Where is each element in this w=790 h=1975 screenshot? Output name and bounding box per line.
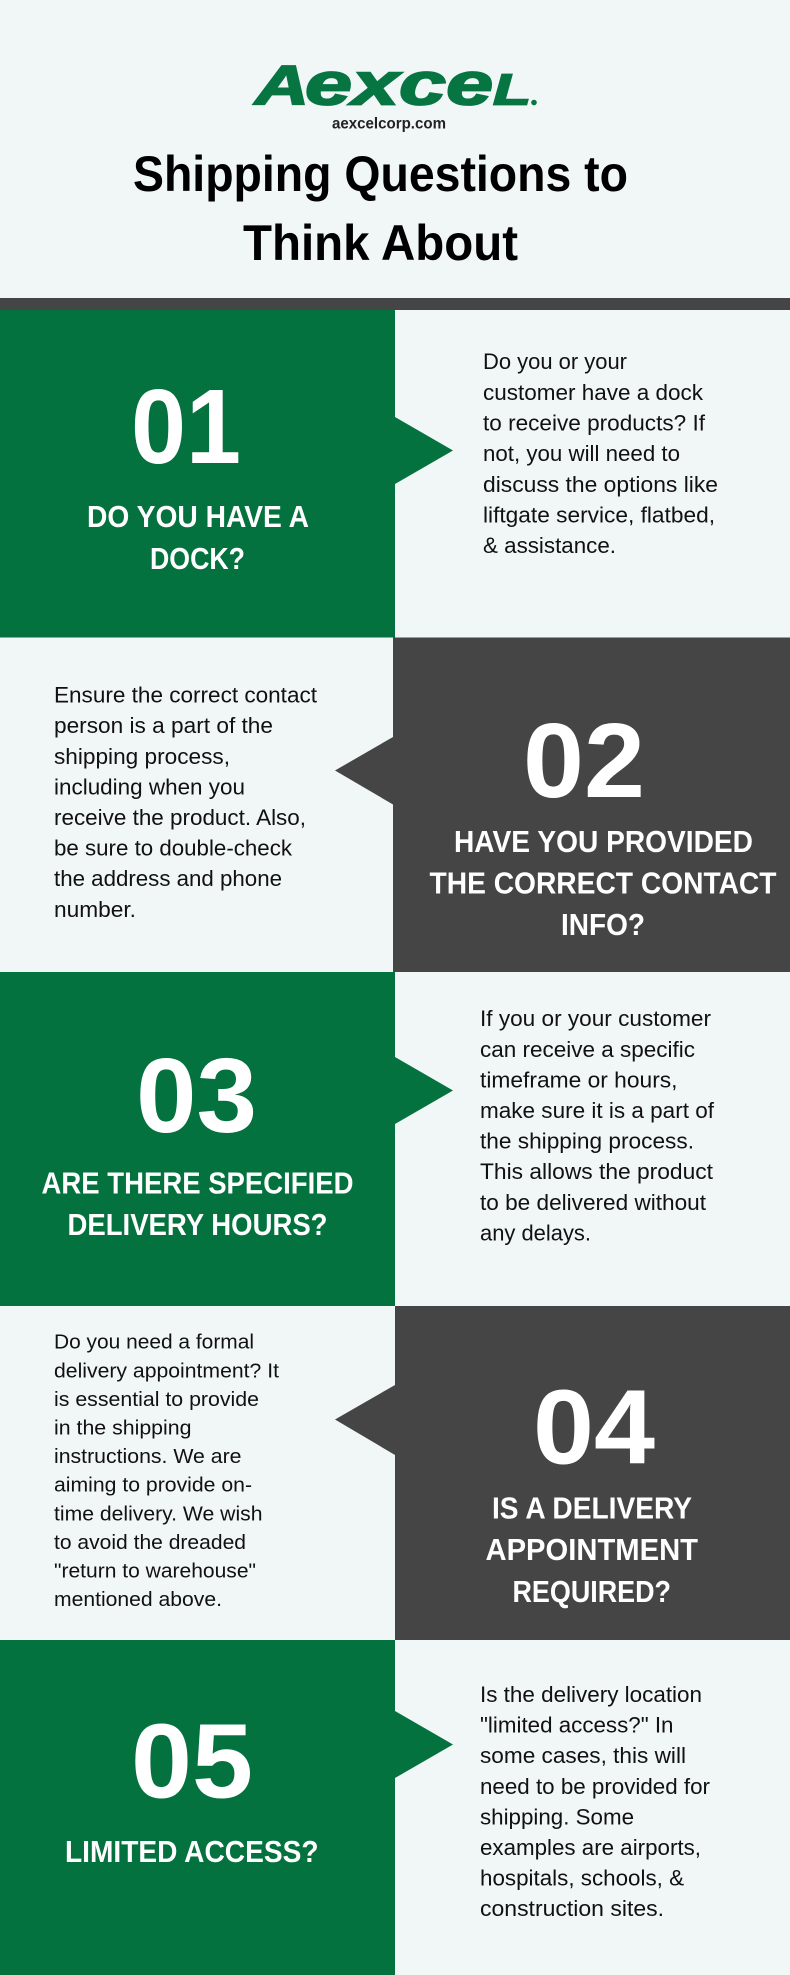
body text: [483, 349, 718, 558]
body text: examples are airports,: [480, 1835, 701, 1860]
green block with arrow: [0, 310, 453, 638]
body text: Do you or your: [483, 349, 627, 374]
panel: 04 appointment: [54, 1306, 790, 1640]
dark block with arrow: [335, 1306, 790, 1640]
body text: "return to warehouse": [54, 1560, 256, 1582]
heading: ARE THERE SPECIFIED: [42, 1166, 354, 1200]
body text: time delivery. We wish: [54, 1502, 262, 1525]
heading: [430, 825, 777, 942]
body text: need to be provided for: [480, 1774, 710, 1799]
body text: number.: [54, 897, 136, 922]
body text: the shipping process.: [480, 1129, 694, 1154]
heading: REQUIRED?: [512, 1575, 671, 1609]
body text: including when you: [54, 774, 245, 799]
header: [133, 50, 628, 271]
divider bar: [0, 298, 790, 310]
body text: Is the delivery location: [480, 1682, 702, 1707]
panel: 03 delivery hours: [0, 972, 715, 1306]
heading: [87, 500, 309, 576]
body text: construction sites.: [480, 1896, 664, 1921]
body text: is essential to provide: [54, 1388, 259, 1411]
logo: Aexcel: A: [252, 54, 309, 116]
body text: [54, 683, 317, 922]
title: Think About: [243, 215, 518, 271]
heading: HAVE YOU PROVIDED: [454, 825, 753, 859]
number 04: 04: [533, 1368, 655, 1486]
heading: LIMITED ACCESS?: [65, 1835, 318, 1869]
dark block with arrow: [335, 638, 790, 972]
body text: hospitals, schools, &: [480, 1866, 684, 1891]
body text: shipping. Some: [480, 1804, 634, 1829]
body text: any delays.: [480, 1220, 591, 1245]
logo: Aexcel: exce L: [305, 50, 531, 118]
body text: instructions. We are: [54, 1445, 242, 1468]
body text: "limited access?" In: [480, 1713, 674, 1738]
body text: Do you need a formal: [54, 1331, 254, 1354]
body text: Ensure the correct contact: [54, 683, 317, 708]
number 05: 05: [131, 1703, 253, 1821]
number 03: 03: [136, 1037, 257, 1155]
body text: receive the product. Also,: [54, 805, 306, 830]
body text: make sure it is a part of: [480, 1098, 715, 1123]
body text: mentioned above.: [54, 1588, 222, 1611]
panel: 05 limited access: [0, 1640, 710, 1975]
body text: person is a part of the: [54, 713, 273, 738]
body text: in the shipping: [54, 1416, 192, 1440]
panel: 01 dock: [0, 310, 718, 638]
body text: [54, 1331, 279, 1611]
green block with arrow: [0, 1640, 453, 1975]
body text: This allows the product: [480, 1159, 713, 1184]
heading: [486, 1492, 698, 1609]
body text: & assistance.: [483, 533, 616, 558]
body text: the address and phone: [54, 866, 282, 891]
body text: to avoid the dreaded: [54, 1531, 246, 1554]
heading: DOCK?: [150, 542, 245, 576]
panel: 02 contact: [54, 638, 790, 972]
body text: If you or your customer: [480, 1006, 711, 1031]
body text: timeframe or hours,: [480, 1067, 678, 1092]
heading: APPOINTMENT: [486, 1533, 698, 1567]
title: Shipping Questions to: [133, 146, 628, 202]
body text: to be delivered without: [480, 1190, 706, 1215]
body text: to receive products? If: [483, 410, 706, 436]
body text: liftgate service, flatbed,: [483, 502, 715, 528]
body text: shipping process,: [54, 744, 230, 769]
body text: [480, 1006, 715, 1245]
body text: [480, 1682, 710, 1921]
body text: customer have a dock: [483, 380, 704, 405]
body text: aiming to provide on-: [54, 1474, 252, 1497]
number 01: 01: [131, 368, 241, 486]
heading: DELIVERY HOURS?: [68, 1208, 328, 1242]
heading: INFO?: [561, 908, 645, 942]
title: [133, 146, 628, 271]
body text: discuss the options like: [483, 472, 718, 497]
body text: can receive a specific: [480, 1037, 695, 1062]
heading: DO YOU HAVE A: [87, 500, 309, 534]
green block with arrow: [0, 972, 453, 1306]
heading: [42, 1166, 354, 1242]
heading: IS A DELIVERY: [492, 1492, 692, 1526]
body text: be sure to double-check: [54, 836, 293, 861]
website: aexcelcorp.com: [332, 116, 446, 132]
number 02: 02: [523, 702, 645, 820]
body text: delivery appointment? It: [54, 1359, 279, 1382]
body text: some cases, this will: [480, 1743, 686, 1768]
body text: not, you will need to: [483, 441, 680, 466]
